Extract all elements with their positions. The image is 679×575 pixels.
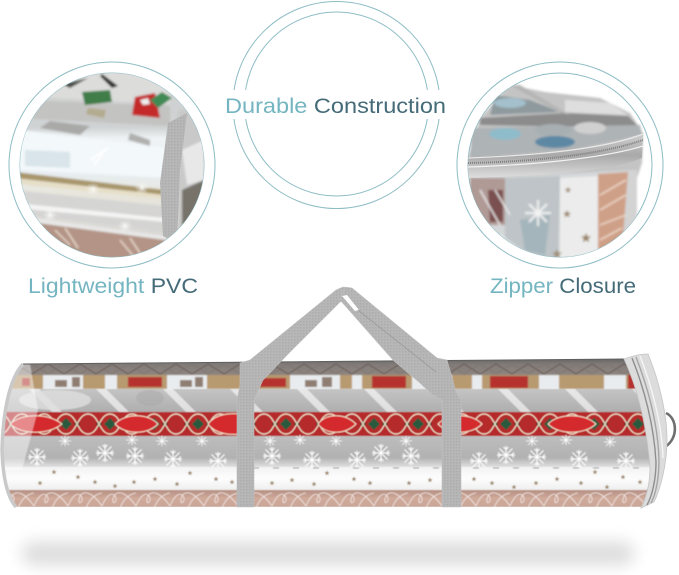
roll: silver with glints <box>0 389 679 412</box>
right zipper end cap <box>624 354 667 508</box>
top edge line <box>23 359 626 364</box>
product: gift wrap storage bag <box>0 287 679 508</box>
outer ring <box>457 62 663 268</box>
clear pvc glare at left end <box>2 364 38 470</box>
photo: pvc close-up <box>15 70 210 262</box>
panel: lightweight pvc circle <box>9 62 215 268</box>
inner ring <box>20 73 204 257</box>
label: lightweight pvc: Lightweight PVC <box>28 275 198 298</box>
label: zipper closure: Zipper Closure <box>490 275 636 298</box>
roll: santa print <box>0 375 679 389</box>
roll: white with stars <box>0 467 679 490</box>
top band <box>18 360 630 376</box>
heading: durable construction: Durable Construction <box>225 95 446 118</box>
zipper band <box>468 133 643 178</box>
panel: durable construction circle <box>222 2 450 208</box>
rolls inside bag <box>0 355 679 507</box>
shadow under bag <box>22 542 634 565</box>
roll: snowflakes on silver <box>0 435 679 470</box>
photo: zipper close-up <box>468 85 643 262</box>
strap <box>160 113 187 243</box>
small carry loop at right end <box>665 413 675 447</box>
outer ring <box>233 2 440 208</box>
left handle strap <box>237 287 352 507</box>
inner ring <box>468 73 652 257</box>
roll: rose gold swirls <box>0 490 679 507</box>
panel: zipper closure circle <box>457 62 663 268</box>
fold line between handle bands <box>358 310 436 372</box>
left end cap <box>2 364 23 507</box>
inner ring <box>244 12 428 196</box>
ring gap behind label <box>222 90 450 119</box>
handle slit <box>342 295 359 311</box>
roll: red plaid <box>0 412 679 436</box>
right handle strap <box>340 287 461 507</box>
outer ring <box>9 62 215 268</box>
